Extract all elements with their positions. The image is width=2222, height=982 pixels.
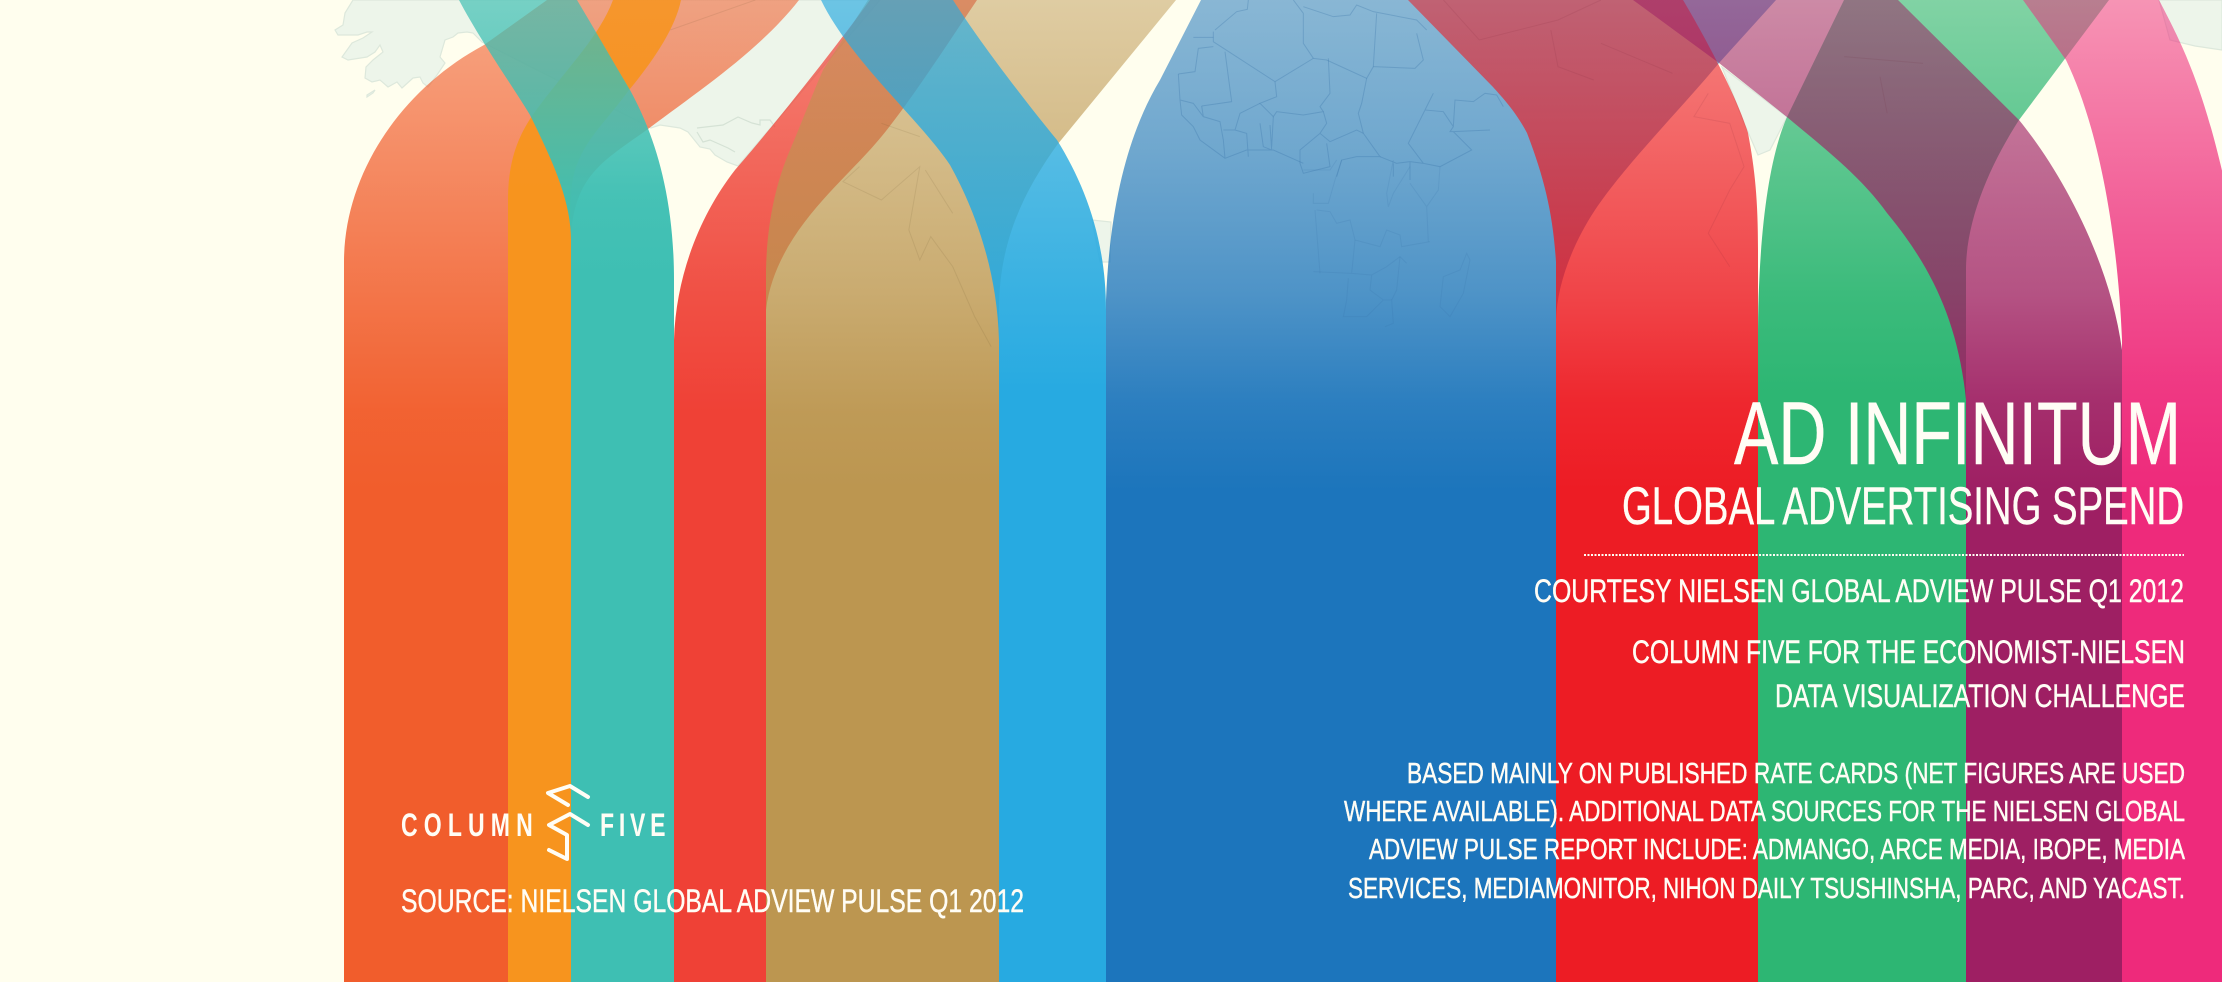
band: teal xyxy=(459,0,674,982)
credit: column five xyxy=(1632,634,2185,714)
logo: Column Five xyxy=(401,786,670,859)
map borders: North America and Asia over orange and tan bands xyxy=(670,0,991,347)
band: red xyxy=(674,0,977,982)
band: tan xyxy=(766,0,1176,982)
band: green xyxy=(1758,0,2109,982)
band: light blue xyxy=(821,0,1106,982)
world map land xyxy=(335,0,2222,262)
logo: Column Five: FIVE xyxy=(600,807,670,843)
band: purple xyxy=(1633,0,2122,982)
map borders: Middle East and Asia over red, green and purple bands xyxy=(1443,0,1923,267)
band: crimson red xyxy=(1408,0,1758,982)
band: blue xyxy=(1106,0,1776,982)
map borders: northern Africa over blue band xyxy=(1178,0,1503,180)
map borders: Mexico outline xyxy=(697,117,775,152)
band: orange-red xyxy=(344,0,799,982)
methodology note xyxy=(1344,758,2186,905)
logo: Column Five: COLUMN xyxy=(401,807,537,843)
band: orange xyxy=(508,0,681,982)
icon: Column Five chevrons xyxy=(548,786,588,859)
map borders: southern Africa over blue band xyxy=(1303,160,1470,327)
source line: SOURCE: NIELSEN GLOBAL ADVIEW PULSE Q1 2012 xyxy=(401,883,1024,919)
dotted divider xyxy=(1584,554,2184,556)
band: pink xyxy=(2023,0,2222,982)
